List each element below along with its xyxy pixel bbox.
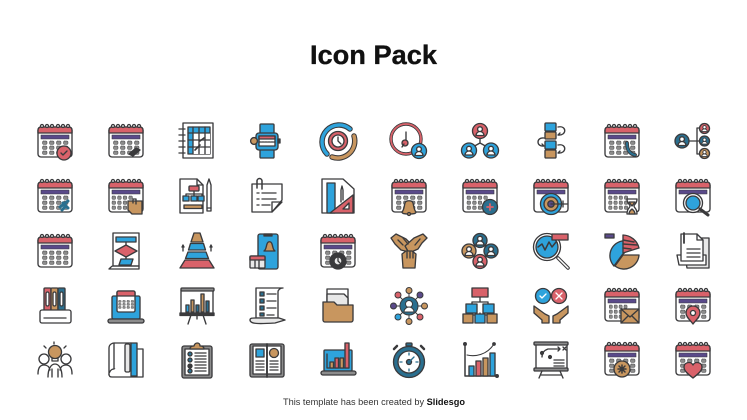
icon: stopwatch (394, 343, 424, 378)
icon: calendar with clock (321, 234, 355, 269)
icon: laptop with calendar (108, 291, 144, 323)
icon: calendar with eraser (109, 124, 143, 157)
icon: calendar with pin (38, 180, 72, 212)
icon: clock with circular arrows (322, 125, 355, 158)
icon: document with flow chart and pencil (180, 179, 211, 213)
icon: growth bar chart (464, 343, 498, 377)
icon: smart watch (251, 124, 280, 158)
icon: calendar with hourglass (605, 180, 639, 214)
icon: process flow blocks (538, 123, 565, 158)
icon: pyramid (180, 233, 214, 268)
icon: person hierarchy (675, 124, 710, 158)
icon: clock with person badge (391, 124, 426, 158)
icon: organization chart (463, 288, 497, 323)
icon: ruler and set square (322, 179, 354, 213)
icon: magnifier with trend (534, 234, 568, 268)
icon: spiral notebook table (179, 123, 213, 158)
icon: checklist scroll with pen (250, 288, 285, 324)
footer credit: This template has been created by Slidesgo (283, 397, 466, 407)
icon: calendar with location pin (676, 288, 710, 324)
icon: rolled paper with ruler and pencil (109, 343, 143, 377)
icon: people network hub (390, 288, 428, 324)
icon: calendar with envelope (605, 288, 639, 323)
icon: calendar with heart (676, 342, 710, 378)
icon: tan folder (323, 289, 353, 322)
icon: calendar with target (534, 180, 568, 214)
icon: calendar with sticky note (109, 180, 143, 214)
icon: three joined hands (391, 234, 427, 268)
title: Icon Pack (310, 40, 438, 70)
icon: hands with check and cross (534, 288, 568, 323)
icon: four people network (462, 234, 498, 268)
icon: calendar with tan badge (605, 342, 639, 377)
icon: three connected people (462, 124, 498, 158)
icon: strategy board (534, 342, 568, 378)
icon: calendar with check badge (38, 124, 72, 160)
icon: clipped note (252, 178, 282, 212)
icon: plain calendar (38, 234, 72, 267)
icon: calendar with bell (392, 180, 426, 216)
icon: people with light bulb (38, 342, 72, 377)
icon: open book (250, 344, 284, 377)
icon: calendar with phone (605, 124, 639, 157)
icon: calendar with plus badge (463, 180, 498, 214)
icon: binders in tray (40, 288, 71, 323)
icon: pie chart (605, 234, 639, 269)
icon: phone with bell and mini calendar (250, 234, 278, 269)
icon: document pile (677, 233, 709, 268)
icon: flow chart paper (109, 233, 139, 269)
icon: clipboard checklist (182, 343, 212, 378)
icon: calendar with magnifier (676, 180, 710, 215)
icon: laptop with bar chart (321, 343, 356, 375)
icon: presentation easel chart (180, 288, 214, 324)
